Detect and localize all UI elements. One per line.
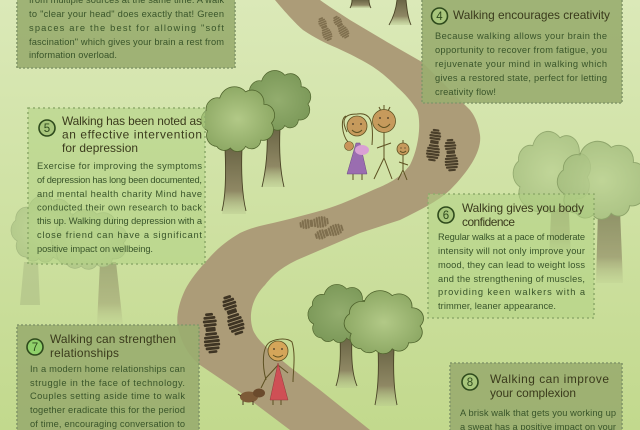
- number badge 7: [27, 339, 43, 355]
- panel 4: creativity: [422, 0, 622, 103]
- heading: [62, 114, 202, 155]
- tree: pale left pair: [11, 196, 127, 325]
- panel 7: relationships: [17, 325, 199, 430]
- body text: this up. Walking during depression with a: [37, 216, 203, 226]
- heading: Walking encourages creativity: [453, 8, 610, 22]
- body text: positive impact on wellbeing.: [37, 244, 153, 254]
- tree: bottom front: [344, 291, 424, 406]
- tree: centre back: [245, 71, 311, 187]
- heading: your complexion: [490, 386, 576, 400]
- number badge 6: [438, 207, 454, 223]
- heading: Walking can strengthen: [50, 332, 176, 346]
- woman with baby: [342, 114, 372, 180]
- dog: [238, 388, 265, 405]
- panel 8: complexion: [450, 363, 622, 430]
- body text: opportunity to recover from fatigue, you: [435, 45, 607, 55]
- body text: rejuvenate your mind in walking which: [435, 59, 607, 69]
- body text: A brisk walk that gets you working up: [460, 408, 616, 418]
- body text: Regular walks at a pace of moderate: [438, 232, 585, 242]
- body text: Because walking allows your brain the: [435, 31, 607, 41]
- panel 3: clear your head: [17, 0, 235, 68]
- child: [397, 140, 409, 180]
- number badge 6: 6: [443, 210, 449, 222]
- body text: [438, 232, 586, 311]
- footprints: top of path: [316, 14, 351, 42]
- body text: mood, they can lead to weight loss: [438, 260, 585, 270]
- heading: confidence: [462, 215, 515, 229]
- body text: [37, 161, 203, 254]
- body text: and the strengthening of muscles,: [438, 274, 585, 284]
- heading: [490, 372, 609, 400]
- heading: relationships: [50, 346, 119, 360]
- body text: [29, 0, 224, 60]
- heading: for depression: [62, 141, 138, 155]
- body text: conducted their own research to back: [37, 202, 202, 212]
- tree: top trunks: [350, 0, 411, 25]
- body text: [30, 364, 185, 429]
- body text: [435, 31, 607, 97]
- body text: of time, encouraging conversation to: [30, 419, 185, 429]
- body text: gives a restored state, perfect for letting: [435, 73, 607, 83]
- body text: providing keen walkers with a: [438, 287, 586, 297]
- body text: trimmer, leaner appearance.: [438, 301, 556, 311]
- girl walking dog: [238, 339, 294, 405]
- footprints: beside family: [425, 128, 459, 172]
- body text: spaces are the best for allowing "soft: [29, 23, 224, 33]
- body text: In a modern home relationships can: [30, 364, 185, 374]
- body text: [460, 408, 616, 430]
- tree: bottom back: [308, 284, 372, 388]
- number badge 5: 5: [44, 123, 50, 135]
- heading: Walking can improve: [490, 372, 609, 386]
- family figures: [342, 105, 409, 180]
- number badge 4: 4: [436, 11, 443, 23]
- heading: [462, 201, 584, 229]
- body text: Couples setting aside time to walk: [30, 391, 185, 401]
- body text: struggle in the face of technology.: [30, 378, 185, 388]
- winding path: [177, 0, 480, 430]
- body text: to "clear your head" does exactly that! Green: [29, 9, 224, 19]
- number badge 7: 7: [32, 342, 38, 354]
- body text: close friend can have a significant: [37, 230, 202, 240]
- panel 5: depression: [28, 108, 205, 264]
- body text: of depression has long been documented,: [37, 175, 202, 185]
- number badge 5: [39, 120, 55, 136]
- tree: right back: [513, 131, 591, 258]
- tree: centre front: [201, 87, 275, 214]
- body text: together eradicate this for the period: [30, 405, 185, 415]
- heading: an effective intervention: [62, 128, 202, 142]
- footprints: middle of path: [299, 215, 345, 242]
- panel 6: body confidence: [428, 194, 594, 318]
- man: [372, 105, 396, 179]
- number badge 8: [462, 374, 478, 390]
- body text: and mental health charity Mind have: [37, 189, 202, 199]
- tree: right front: [557, 141, 640, 283]
- body text: creativity flow!: [435, 87, 496, 97]
- number badge 8: 8: [467, 377, 473, 389]
- body text: Exercise for improving the symptoms: [37, 161, 202, 171]
- body text: intensity will not only improve your: [438, 246, 585, 256]
- heading: Walking gives you body: [462, 201, 584, 215]
- footprints: lower path: [201, 294, 247, 354]
- heading: Walking has been noted as: [62, 114, 202, 128]
- heading: [50, 332, 176, 360]
- body text: information overload.: [29, 50, 117, 60]
- body text: fascination" which gives your brain a rest from: [29, 37, 224, 47]
- number badge 4: [432, 8, 448, 24]
